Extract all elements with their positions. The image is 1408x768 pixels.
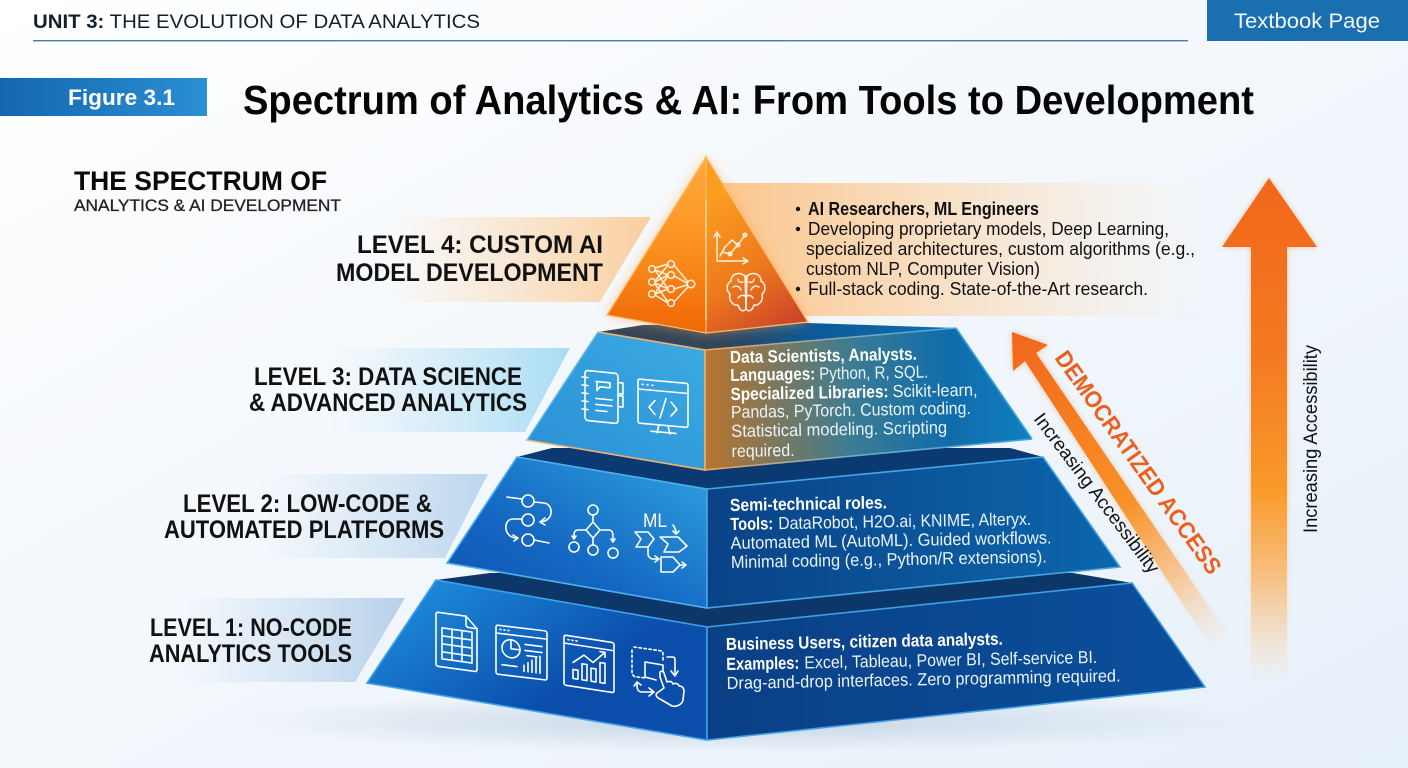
level 2 tier xyxy=(447,448,1120,608)
level 3 text: Scikit-learn, xyxy=(892,380,978,401)
diagonal increasing accessibility label: Increasing Accessibility xyxy=(1029,409,1163,578)
icon: spreadsheet xyxy=(436,612,477,672)
level 1 text: Business Users, citizen data analysts. xyxy=(726,629,1003,654)
figure tag xyxy=(0,78,207,116)
level 2 icons xyxy=(506,495,687,572)
header xyxy=(33,0,1408,41)
icon: notebook xyxy=(582,370,623,424)
level 3 text: Python, R, SQL. xyxy=(819,362,928,383)
icon: neural network xyxy=(649,261,695,306)
icon: decision tree xyxy=(569,505,618,558)
level 1 text: Excel, Tableau, Power BI, Self-service BI. xyxy=(804,647,1097,672)
level 2 label: LEVEL 2: LOW-CODE & xyxy=(183,490,432,518)
level 4 description panel: Full-stack coding. State-of-the-Art research. xyxy=(808,279,1148,299)
level 3 text: required. xyxy=(731,440,795,461)
level 2 text: Automated ML (AutoML). Guided workflows. xyxy=(730,527,1052,553)
icon: drag and drop xyxy=(632,647,684,706)
vertical arrow xyxy=(1222,178,1317,682)
icon: dashboard xyxy=(496,625,547,680)
textbook page tag xyxy=(1207,0,1408,41)
spectrum heading xyxy=(74,166,341,215)
icon: workflow loop xyxy=(506,495,551,546)
icon: chart window xyxy=(564,635,614,693)
level 3 text: Data Scientists, Analysts. xyxy=(730,344,917,367)
level 3 icons xyxy=(582,370,688,436)
unit heading: UNIT 3: THE EVOLUTION OF DATA ANALYTICS xyxy=(33,11,480,33)
level 1 label xyxy=(149,598,405,682)
level 3 label: LEVEL 3: DATA SCIENCE xyxy=(254,363,522,391)
level 4 label: LEVEL 4: CUSTOM AI xyxy=(357,231,603,259)
level 2 label xyxy=(164,474,488,558)
icon: ml flow xyxy=(635,511,687,572)
level 4 description panel xyxy=(723,183,1215,316)
level 1 text: Drag-and-drop interfaces. Zero programming required. xyxy=(726,665,1121,693)
diagonal arrow xyxy=(1012,332,1232,652)
icon: ml flow: ML xyxy=(643,511,667,532)
level 3 text: Specialized Libraries: xyxy=(730,381,889,404)
level 4 label xyxy=(336,217,651,302)
level 1 label: ANALYTICS TOOLS xyxy=(149,640,352,668)
level 1 tier xyxy=(367,573,1205,740)
level 4 tier xyxy=(607,157,808,333)
title: Spectrum of Analytics & AI: From Tools to Development xyxy=(243,77,1254,123)
level 1 text xyxy=(726,626,1121,693)
level 3 text xyxy=(730,343,979,461)
textbook page tag: Textbook Page xyxy=(1234,10,1380,33)
level 1 text: Examples: xyxy=(726,653,799,674)
level 3 tier xyxy=(527,323,1032,470)
level 2 text: DataRobot, H2O.ai, KNIME, Alteryx. xyxy=(778,509,1031,533)
level 1 icons xyxy=(436,612,684,706)
level 4 description panel: custom NLP, Computer Vision) xyxy=(806,259,1040,279)
level 2 text xyxy=(730,489,1052,572)
democratized access label: DEMOCRATIZED ACCESS xyxy=(1050,346,1227,579)
icon: code monitor xyxy=(638,379,688,436)
icon: brain xyxy=(727,274,765,311)
spectrum heading: ANALYTICS & AI DEVELOPMENT xyxy=(74,196,341,215)
level 4 description panel: AI Researchers, ML Engineers xyxy=(808,199,1039,219)
level 3 label xyxy=(249,348,570,432)
pyramid shadow xyxy=(220,692,1260,752)
level 4 description panel: Developing proprietary models, Deep Learning, xyxy=(808,219,1169,239)
level 2 text: Minimal coding (e.g., Python/R extensions). xyxy=(731,546,1047,572)
level 3 text: Languages: xyxy=(730,364,815,385)
level 1 label: LEVEL 1: NO-CODE xyxy=(150,614,352,642)
level 4 description panel: specialized architectures, custom algorithms (e.g., xyxy=(806,239,1195,259)
spectrum heading: THE SPECTRUM OF xyxy=(74,166,327,196)
level 3 label: & ADVANCED ANALYTICS xyxy=(249,389,527,417)
icon: growth chart xyxy=(714,232,748,264)
figure tag: Figure 3.1 xyxy=(68,85,175,110)
level 3 text: Pandas, PyTorch. Custom coding. xyxy=(731,398,971,422)
level 2 label: AUTOMATED PLATFORMS xyxy=(164,516,444,544)
level 4 label: MODEL DEVELOPMENT xyxy=(336,259,603,287)
level 2 text: Tools: xyxy=(730,513,773,534)
level 2 text: Semi-technical roles. xyxy=(730,492,887,515)
vertical increasing accessibility label: Increasing Accessibility xyxy=(1301,345,1322,533)
level 3 text: Statistical modeling. Scripting xyxy=(731,417,947,441)
